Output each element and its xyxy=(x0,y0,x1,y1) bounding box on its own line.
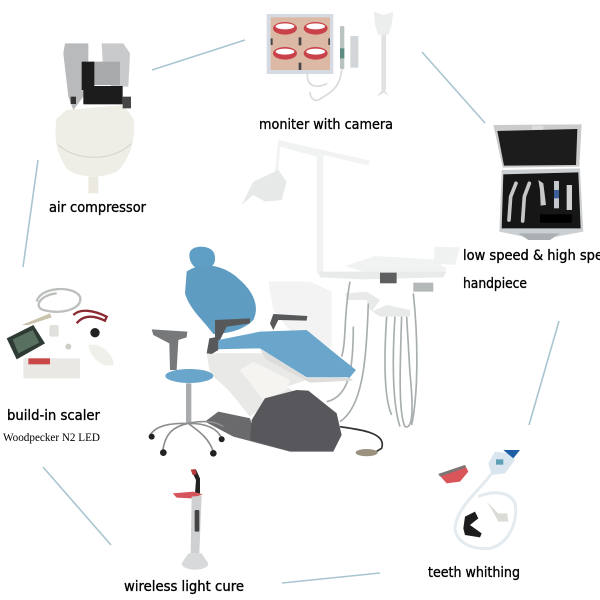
operator stool xyxy=(149,329,225,457)
compressor image xyxy=(55,43,134,193)
lamp arm and post xyxy=(242,140,370,273)
chair grey base xyxy=(205,412,290,452)
label: monitor with camera: moniter with camera xyxy=(259,117,393,133)
label: Woodpecker N2 LED: Woodpecker N2 LED xyxy=(3,432,100,444)
chair backrest xyxy=(185,265,256,334)
build-in scaler xyxy=(3,289,113,444)
central dental chair unit xyxy=(149,140,460,457)
cuspidor base xyxy=(268,282,332,357)
label: build-in scaler: build-in scaler xyxy=(7,408,100,424)
curing light image xyxy=(173,469,208,570)
headrest xyxy=(189,247,215,267)
monitor with camera xyxy=(259,12,393,133)
label: air compressor: air compressor xyxy=(49,200,146,216)
instrument hoses xyxy=(327,282,417,427)
handpiece case image xyxy=(493,124,583,240)
foot pedal cable xyxy=(340,427,382,453)
scaler kit image xyxy=(7,289,113,378)
label: handpiece: handpiece xyxy=(463,276,527,292)
label: wireless light cure: wireless light cure xyxy=(124,579,244,595)
armrests xyxy=(207,314,307,354)
wireless light cure xyxy=(124,469,244,595)
chair white support xyxy=(207,353,350,417)
teeth whitening xyxy=(428,450,520,581)
air compressor xyxy=(49,43,146,216)
handpiece case xyxy=(463,124,600,292)
instrument tray xyxy=(318,247,460,317)
whitening lamp image xyxy=(438,450,520,549)
label: teeth whitening: teeth whithing xyxy=(428,565,520,581)
monitor image xyxy=(267,12,393,100)
chair seat xyxy=(218,330,356,377)
foot pedal xyxy=(356,449,378,456)
